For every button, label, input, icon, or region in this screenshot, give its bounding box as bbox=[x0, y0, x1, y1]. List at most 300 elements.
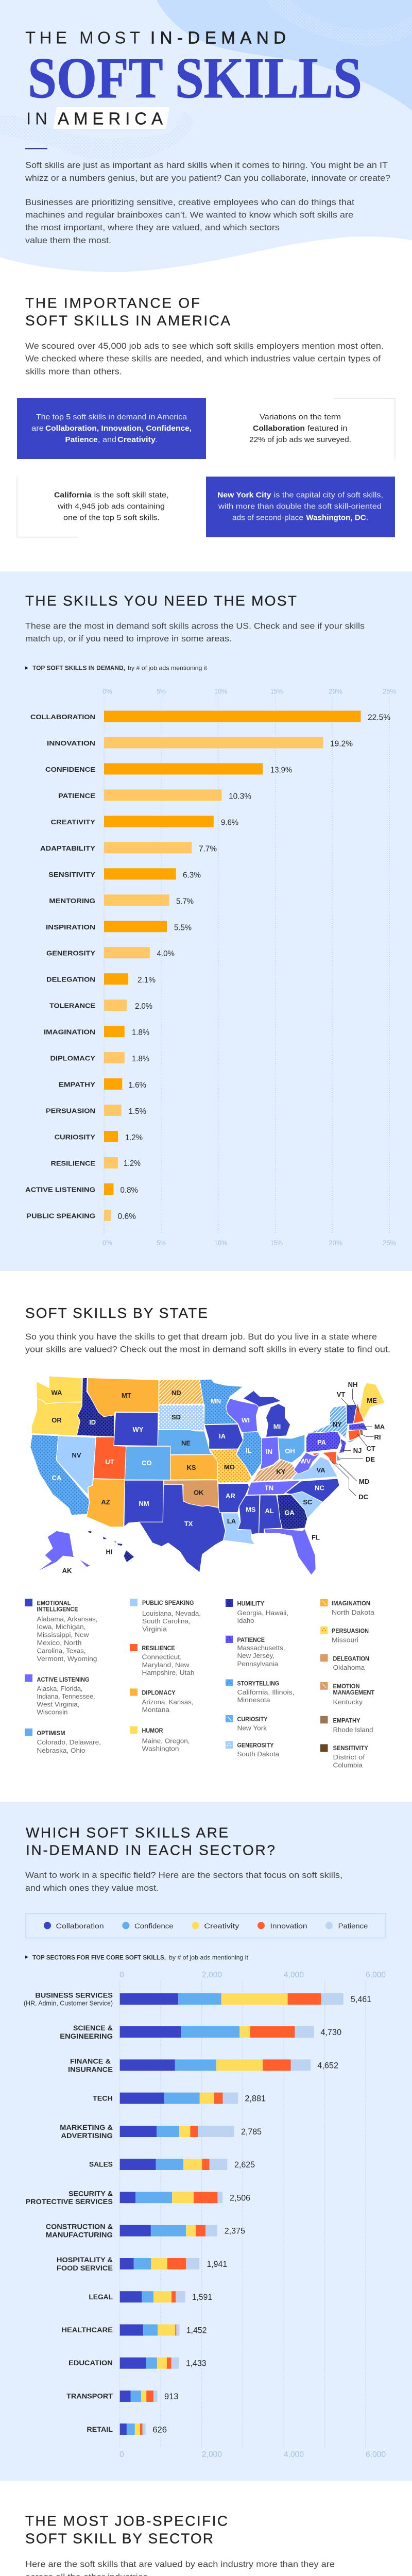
bar: sensitivity: 6.3% bbox=[183, 871, 201, 879]
row: business services: (HR, Admin, Customer Service) bbox=[24, 2000, 113, 2007]
legend: storytelling: STORYTELLING bbox=[237, 1681, 279, 1687]
bar: tolerance bbox=[49, 999, 152, 1011]
legend: resilience: Connecticut, bbox=[142, 1653, 182, 1661]
state: VA bbox=[291, 1457, 338, 1480]
heading bbox=[26, 1824, 275, 1858]
intro text: match up, or if you need to improve in some areas. bbox=[25, 634, 232, 643]
state labels: HI bbox=[106, 1548, 112, 1556]
legend: sensitivity: SENSITIVITY bbox=[333, 1745, 368, 1752]
row: finance and insurance: INSURANCE bbox=[68, 2065, 113, 2073]
bar: adaptability: ADAPTABILITY bbox=[40, 844, 95, 852]
state labels: MI bbox=[273, 1423, 281, 1431]
bar: active listening bbox=[25, 1183, 138, 1195]
legend: emotional intelligence: Carolina, Texas, bbox=[37, 1647, 85, 1654]
bar: confidence bbox=[45, 763, 292, 774]
bar: adaptability: 7.7% bbox=[199, 844, 217, 853]
bar: adaptability bbox=[40, 842, 217, 853]
axis labels top: 10% bbox=[214, 688, 227, 696]
legend: humility: HUMILITY bbox=[237, 1601, 264, 1607]
heading: SOFT SKILLS BY STATE bbox=[25, 1305, 208, 1321]
row: construction and manufacturing: CONSTRUCTION & bbox=[46, 2223, 113, 2231]
legend: humor: Washington bbox=[142, 1745, 179, 1753]
row: hospitality and food service: HOSPITALITY & bbox=[57, 2256, 113, 2264]
state labels: DE bbox=[366, 1455, 375, 1463]
row: sales bbox=[89, 2159, 255, 2170]
row: hospitality and food service bbox=[57, 2256, 227, 2272]
state: TX bbox=[139, 1484, 226, 1572]
bar: imagination bbox=[44, 1026, 149, 1037]
chart legend: Confidence bbox=[134, 1922, 174, 1930]
intro text bbox=[25, 622, 365, 643]
intro text bbox=[25, 1332, 390, 1354]
legend: humility bbox=[226, 1599, 288, 1624]
chart legend: Patience bbox=[338, 1922, 368, 1930]
state labels: KS bbox=[186, 1464, 196, 1471]
legend: emotional intelligence: Iowa, Michigan, bbox=[37, 1623, 85, 1631]
legend: humility: Idaho bbox=[237, 1617, 254, 1624]
intro text: These are the most in demand soft skills across the US. Check and see if your skills bbox=[25, 622, 365, 631]
bar: inspiration bbox=[46, 921, 192, 932]
callout: top 5 skills: The top 5 soft skills in demand in America bbox=[36, 413, 187, 421]
bar: generosity bbox=[46, 947, 175, 958]
state labels: DC bbox=[358, 1493, 369, 1501]
legend: delegation: Oklahoma bbox=[333, 1664, 365, 1671]
legend: empathy: EMPATHY bbox=[333, 1718, 360, 1724]
chart title bbox=[25, 1954, 249, 1961]
row: science and engineering: ENGINEERING bbox=[60, 2032, 113, 2040]
bar: curiosity bbox=[55, 1131, 143, 1142]
legend: empathy bbox=[320, 1716, 373, 1734]
state labels: LA bbox=[227, 1517, 236, 1525]
bar: mentoring: MENTORING bbox=[49, 897, 95, 905]
legend: public speaking: Virginia bbox=[142, 1625, 167, 1633]
legend: persuasion: Missouri bbox=[332, 1636, 358, 1643]
state labels: CT bbox=[366, 1445, 375, 1452]
callout: california: California bbox=[54, 490, 92, 499]
legend: diplomacy bbox=[130, 1688, 194, 1714]
bar: public speaking: PUBLIC SPEAKING bbox=[27, 1212, 95, 1219]
leader lines bbox=[330, 1389, 374, 1496]
bar: confidence: CONFIDENCE bbox=[45, 766, 95, 773]
callout: top 5 skills bbox=[17, 398, 206, 459]
legend: public speaking: Louisiana, Nevada, bbox=[142, 1609, 201, 1617]
legend: resilience: RESILIENCE bbox=[142, 1646, 175, 1652]
chart legend: Creativity bbox=[204, 1922, 239, 1930]
bar: patience: PATIENCE bbox=[58, 792, 95, 800]
state labels: MO bbox=[224, 1463, 235, 1471]
state: TN bbox=[247, 1481, 301, 1495]
legend: emotional intelligence: INTELLIGENCE bbox=[37, 1606, 78, 1613]
state: FL bbox=[264, 1529, 316, 1575]
panel: soft skills by state bbox=[25, 1305, 390, 1769]
state: MN bbox=[200, 1379, 243, 1425]
row: tech bbox=[93, 2093, 266, 2104]
callout: new york city: New York City bbox=[217, 490, 271, 499]
state: LA bbox=[222, 1513, 255, 1545]
state labels: NE bbox=[181, 1439, 191, 1447]
state: NH bbox=[353, 1403, 364, 1423]
bar: creativity: CREATIVITY bbox=[50, 818, 95, 826]
state: MT bbox=[87, 1378, 159, 1417]
row: science and engineering bbox=[60, 2024, 341, 2040]
state labels: IN bbox=[266, 1448, 272, 1455]
state: DC bbox=[330, 1460, 332, 1462]
chart title bbox=[25, 665, 208, 672]
state: NC bbox=[285, 1479, 339, 1502]
row: finance and insurance: FINANCE & bbox=[70, 2057, 111, 2065]
callout: top 5 skills: . bbox=[156, 435, 158, 444]
heading bbox=[25, 295, 230, 328]
chart title: by # of job ads mentioning it bbox=[169, 1954, 249, 1961]
intro text bbox=[25, 1871, 342, 1893]
row: sales: SALES bbox=[89, 2160, 113, 2168]
chart title: by # of job ads mentioning it bbox=[128, 665, 208, 672]
legend: emotional intelligence bbox=[25, 1599, 98, 1663]
legend: patience: Pennsylvania bbox=[237, 1660, 279, 1668]
legend: persuasion: PERSUASION bbox=[332, 1628, 369, 1634]
legend: optimism: OPTIMISM bbox=[37, 1731, 65, 1737]
legend: sensitivity: Columbia bbox=[333, 1761, 363, 1769]
row: security and protective services: 2,506 bbox=[230, 2193, 250, 2203]
state labels: CO bbox=[142, 1459, 151, 1467]
heading: WHICH SOFT SKILLS ARE bbox=[26, 1824, 228, 1840]
row: marketing and advertising bbox=[60, 2123, 262, 2140]
axis labels bottom: 6,000 bbox=[366, 2450, 386, 2459]
bar: diplomacy: 1.8% bbox=[132, 1055, 149, 1063]
row: security and protective services bbox=[26, 2189, 250, 2206]
axis labels top: 0% bbox=[102, 688, 112, 696]
bar: curiosity: 1.2% bbox=[125, 1133, 143, 1142]
row: construction and manufacturing: 2,375 bbox=[225, 2226, 245, 2236]
bar: collaboration: 22.5% bbox=[368, 713, 390, 722]
bar: innovation: 19.2% bbox=[330, 740, 353, 748]
legend: active listening: Wisconsin bbox=[37, 1708, 68, 1716]
callout: collaboration variations: 22% of job ads we surveyed. bbox=[249, 435, 351, 444]
intro text: We scoured over 45,000 job ads to see which soft skills employers mention most often. bbox=[25, 342, 384, 351]
row: science and engineering: 4,730 bbox=[320, 2027, 341, 2037]
callout: top 5 skills: are bbox=[31, 424, 44, 433]
state: MS bbox=[238, 1495, 260, 1534]
state: IN bbox=[260, 1437, 279, 1470]
hero title line 3: AMERICA bbox=[58, 109, 163, 128]
state: GA bbox=[277, 1495, 307, 1530]
state: VT bbox=[346, 1404, 357, 1424]
callout: california: is the soft skill state, bbox=[94, 490, 169, 499]
callout: collaboration variations bbox=[249, 398, 395, 459]
state labels: ID bbox=[89, 1418, 96, 1426]
bar: patience bbox=[58, 789, 251, 801]
legend: active listening: Indiana, Tennessee, bbox=[37, 1692, 95, 1700]
row: retail: RETAIL bbox=[87, 2425, 113, 2433]
legend: public speaking bbox=[130, 1599, 201, 1633]
legend: public speaking: PUBLIC SPEAKING bbox=[142, 1600, 194, 1606]
legend: patience: Massachusetts, bbox=[237, 1644, 285, 1652]
bar: tolerance: 2.0% bbox=[135, 1002, 152, 1011]
row: construction and manufacturing bbox=[46, 2223, 245, 2239]
state labels: MD bbox=[359, 1478, 369, 1485]
state labels: AK bbox=[62, 1567, 72, 1574]
axis labels top: 2,000 bbox=[202, 1971, 222, 1979]
bar: inspiration: 5.5% bbox=[174, 923, 192, 932]
axis labels top: 25% bbox=[383, 688, 396, 696]
state labels: RI bbox=[374, 1433, 381, 1441]
map of US states bbox=[30, 1376, 385, 1575]
row: security and protective services: SECURITY & bbox=[68, 2189, 113, 2197]
row: education bbox=[68, 2358, 206, 2369]
state: RI bbox=[359, 1430, 363, 1436]
state: AK bbox=[36, 1531, 91, 1572]
state labels: IA bbox=[219, 1432, 226, 1440]
bar: inspiration: INSPIRATION bbox=[46, 923, 95, 931]
row: business services bbox=[24, 1991, 371, 2007]
state: WA bbox=[36, 1376, 82, 1403]
state labels: OR bbox=[52, 1416, 62, 1424]
bar: public speaking: 0.6% bbox=[117, 1212, 136, 1221]
bar: persuasion: 1.5% bbox=[129, 1107, 146, 1116]
heading: SOFT SKILL BY SECTOR bbox=[25, 2530, 213, 2546]
legend: emotional intelligence: Mexico, North bbox=[37, 1639, 81, 1647]
state labels: MA bbox=[374, 1423, 385, 1431]
row: marketing and advertising: ADVERTISING bbox=[61, 2131, 113, 2140]
callout: collaboration variations: Variations on the term bbox=[260, 413, 341, 421]
axis labels bottom: 5% bbox=[157, 1239, 166, 1247]
legend: sensitivity bbox=[320, 1744, 368, 1769]
row: finance and insurance bbox=[68, 2057, 338, 2073]
state: NE bbox=[158, 1430, 213, 1454]
state labels: NM bbox=[139, 1500, 149, 1507]
state labels: UT bbox=[105, 1458, 114, 1466]
row: retail bbox=[87, 2424, 167, 2435]
state labels: ND bbox=[171, 1389, 181, 1397]
legend: humility: Georgia, Hawaii, bbox=[237, 1609, 288, 1617]
legend: curiosity: New York bbox=[237, 1724, 267, 1732]
state: OH bbox=[278, 1435, 305, 1463]
state labels: SC bbox=[303, 1498, 313, 1506]
hero title: soft skills: SOFT SKILLS bbox=[28, 46, 362, 110]
legend: imagination bbox=[320, 1599, 375, 1616]
bar: curiosity: CURIOSITY bbox=[55, 1133, 95, 1141]
axis labels bottom: 0% bbox=[102, 1239, 112, 1247]
legend: storytelling bbox=[226, 1680, 295, 1704]
row: science and engineering: SCIENCE & bbox=[73, 2024, 113, 2032]
panel: soft skills by sector bbox=[0, 1802, 412, 2481]
state: SD bbox=[159, 1405, 204, 1431]
state labels: NV bbox=[72, 1451, 81, 1459]
bar: innovation: INNOVATION bbox=[47, 739, 95, 747]
state: IA bbox=[204, 1424, 243, 1449]
legend: emotion management: EMOTION bbox=[333, 1684, 359, 1690]
state labels: WA bbox=[52, 1389, 62, 1396]
bar chart: top soft skills bbox=[25, 688, 396, 1247]
bar: mentoring: 5.7% bbox=[176, 897, 194, 906]
row: hospitality and food service: 1,941 bbox=[207, 2259, 227, 2269]
legend: emotional intelligence: EMOTIONAL bbox=[37, 1600, 71, 1606]
row: finance and insurance: 4,652 bbox=[317, 2060, 338, 2070]
bar: sensitivity: SENSITIVITY bbox=[48, 871, 95, 878]
state labels: FL bbox=[312, 1533, 320, 1541]
heading: SOFT SKILLS IN AMERICA bbox=[25, 312, 230, 328]
state: AR bbox=[218, 1483, 249, 1513]
callout: collaboration variations: Collaboration bbox=[253, 424, 305, 433]
state: NY bbox=[308, 1405, 348, 1438]
row: legal: LEGAL bbox=[89, 2293, 113, 2301]
hero intro text: value them the most. bbox=[25, 236, 111, 245]
legend: resilience bbox=[130, 1644, 195, 1676]
legend: emotional intelligence: Mississippi, New bbox=[37, 1631, 89, 1638]
legend: humor: HUMOR bbox=[142, 1728, 163, 1734]
state: CA bbox=[30, 1434, 91, 1515]
row: transport bbox=[66, 2391, 178, 2402]
axis labels top: 15% bbox=[270, 688, 283, 696]
intro text: So you think you have the skills to get that dream job. But do you live in a state where bbox=[25, 1332, 377, 1342]
intro text: your skills are valued? Check out the most in demand soft skills in every state to find out. bbox=[25, 1345, 390, 1354]
heading: IN-DEMAND IN EACH SECTOR? bbox=[26, 1842, 275, 1858]
bar: diplomacy: DIPLOMACY bbox=[50, 1055, 95, 1062]
bar: empathy: EMPATHY bbox=[59, 1081, 95, 1089]
row: retail: 626 bbox=[152, 2425, 167, 2435]
axis labels top bbox=[119, 1971, 386, 1979]
callout: collaboration variations: featured in bbox=[307, 424, 347, 433]
intro text: skills more than others. bbox=[25, 367, 122, 377]
axis labels top: 5% bbox=[157, 688, 166, 696]
state labels: SD bbox=[171, 1413, 181, 1421]
bar: active listening: 0.8% bbox=[121, 1186, 138, 1195]
legend: curiosity: CURIOSITY bbox=[237, 1717, 268, 1723]
callout: top 5 skills: Collaboration, Innovation, Confidence, bbox=[45, 424, 192, 433]
row: marketing and advertising: 2,785 bbox=[241, 2127, 262, 2137]
hero intro text: whizz or a numbers genius, but are you patient? Can you collaborate, innovate or create? bbox=[25, 174, 390, 183]
state: MO bbox=[210, 1449, 252, 1487]
legend: emotional intelligence: Alabama, Arkansas, bbox=[37, 1615, 98, 1623]
state labels: NJ bbox=[353, 1447, 362, 1454]
panel: importance of soft skills bbox=[17, 295, 395, 537]
row: healthcare: HEALTHCARE bbox=[61, 2326, 113, 2334]
row: tech: 2,881 bbox=[245, 2094, 266, 2104]
legend: delegation bbox=[320, 1654, 369, 1671]
legend: delegation: DELEGATION bbox=[333, 1656, 369, 1662]
axis labels top: 4,000 bbox=[284, 1971, 304, 1979]
axis labels top: 0 bbox=[119, 1971, 124, 1979]
bar: collaboration bbox=[30, 711, 390, 722]
state labels: ME bbox=[367, 1397, 377, 1404]
bar: collaboration: COLLABORATION bbox=[30, 713, 95, 721]
legend: humor: Maine, Oregon, bbox=[142, 1737, 190, 1744]
bar: imagination: 1.8% bbox=[132, 1028, 149, 1037]
map legend bbox=[25, 1599, 375, 1769]
row: business services: 5,461 bbox=[351, 1994, 371, 2004]
axis labels bottom bbox=[102, 1239, 396, 1247]
state labels: VT bbox=[337, 1391, 345, 1398]
legend: resilience: Hampshire, Utah bbox=[142, 1669, 195, 1676]
legend: curiosity bbox=[226, 1715, 268, 1732]
bar: creativity: 9.6% bbox=[221, 818, 238, 827]
legend: generosity bbox=[226, 1741, 280, 1758]
state labels: CA bbox=[52, 1474, 62, 1482]
chart title: TOP SECTORS FOR FIVE CORE SOFT SKILLS, bbox=[32, 1954, 166, 1961]
state labels: OK bbox=[194, 1489, 204, 1496]
state labels: WV bbox=[300, 1458, 311, 1465]
legend: diplomacy: DIPLOMACY bbox=[142, 1690, 176, 1696]
legend: active listening: ACTIVE LISTENING bbox=[37, 1677, 90, 1683]
axis labels bottom: 0 bbox=[119, 2450, 124, 2459]
panel: job-specific soft skills bbox=[25, 2513, 386, 2576]
callout: new york city: . bbox=[366, 513, 368, 522]
legend: emotion management bbox=[320, 1682, 374, 1706]
state: ND bbox=[159, 1380, 203, 1404]
legend: emotion management: MANAGEMENT bbox=[333, 1690, 374, 1696]
bar: delegation: DELEGATION bbox=[46, 976, 95, 984]
heading: THE SKILLS YOU NEED THE MOST bbox=[25, 593, 297, 609]
panel: hero bbox=[0, 0, 412, 272]
callout: top 5 skills: Creativity bbox=[117, 435, 156, 444]
row: tech: TECH bbox=[93, 2094, 113, 2102]
legend: optimism: Colorado, Delaware, bbox=[37, 1738, 101, 1746]
legend: storytelling: California, Illinois, bbox=[237, 1688, 295, 1696]
legend: emotion management: Kentucky bbox=[333, 1698, 363, 1706]
state labels: MS bbox=[246, 1506, 256, 1514]
hero title line 3: IN bbox=[26, 109, 47, 128]
bar: resilience: 1.2% bbox=[124, 1159, 141, 1168]
state: IL bbox=[236, 1432, 262, 1477]
row: hospitality and food service: FOOD SERVICE bbox=[57, 2264, 113, 2272]
bar: persuasion bbox=[46, 1105, 146, 1116]
bar: creativity bbox=[50, 816, 238, 827]
state labels: GA bbox=[284, 1509, 295, 1517]
axis labels bottom: 20% bbox=[329, 1239, 342, 1247]
legend: empathy: Rhode Island bbox=[333, 1726, 373, 1734]
row: healthcare bbox=[61, 2325, 207, 2336]
state: SC bbox=[291, 1492, 323, 1519]
state labels: IL bbox=[246, 1447, 252, 1454]
legend: optimism: Nebraska, Ohio bbox=[37, 1747, 85, 1754]
state labels: MT bbox=[122, 1392, 131, 1399]
bar: innovation bbox=[47, 737, 353, 748]
row: legal bbox=[89, 2291, 212, 2302]
row: healthcare: 1,452 bbox=[186, 2326, 207, 2335]
chart legend: Collaboration bbox=[56, 1922, 104, 1930]
state: HI bbox=[88, 1531, 134, 1563]
legend: patience: New Jersey, bbox=[237, 1652, 274, 1659]
state labels: TN bbox=[265, 1484, 273, 1492]
state: NJ bbox=[339, 1438, 346, 1453]
state: CT bbox=[348, 1430, 360, 1442]
legend: generosity: South Dakota bbox=[237, 1750, 280, 1758]
callout: top 5 skills: , and bbox=[98, 435, 116, 444]
state: CO bbox=[125, 1446, 170, 1480]
row: business services: BUSINESS SERVICES bbox=[35, 1991, 113, 1999]
callout: california: one of the top 5 soft skills. bbox=[63, 513, 160, 522]
state: AL bbox=[259, 1495, 282, 1533]
bar: generosity: 4.0% bbox=[157, 950, 175, 958]
state: OK bbox=[164, 1480, 218, 1507]
state: WY bbox=[114, 1412, 158, 1446]
legend: optimism bbox=[25, 1728, 101, 1754]
intro text: Want to work in a specific field? Here are the sectors that focus on soft skills, bbox=[25, 1871, 342, 1880]
state: DE bbox=[337, 1454, 341, 1461]
row: education: EDUCATION bbox=[68, 2359, 113, 2367]
legend: resilience: Maryland, New bbox=[142, 1661, 190, 1669]
callout: new york city: with more than double the soft skill-oriented bbox=[218, 502, 382, 511]
callout: california bbox=[17, 477, 169, 537]
bar: persuasion: PERSUASION bbox=[46, 1107, 95, 1115]
legend: humor bbox=[130, 1726, 190, 1753]
state: ID bbox=[77, 1378, 114, 1437]
bar: imagination: IMAGINATION bbox=[44, 1028, 95, 1036]
intro text: Here are the soft skills that are valued by each industry more than they are bbox=[25, 2560, 335, 2569]
state: MD bbox=[313, 1451, 340, 1465]
chart legend: Innovation bbox=[270, 1922, 307, 1930]
callout: top 5 skills: Patience bbox=[65, 435, 98, 444]
